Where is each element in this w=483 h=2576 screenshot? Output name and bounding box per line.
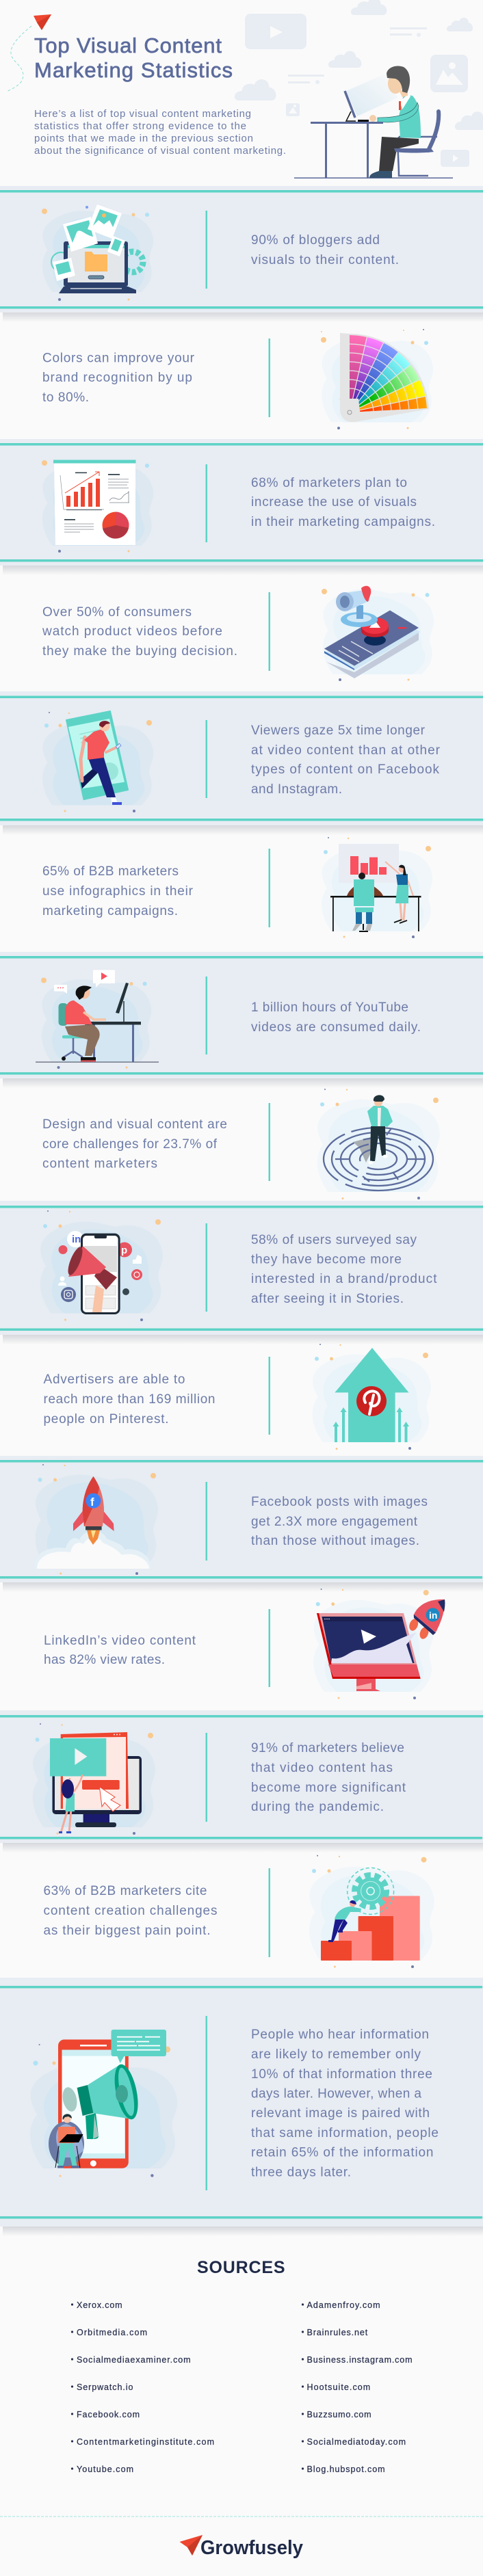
stat text: [251, 233, 399, 267]
intro text block: statistics that offer strong evidence to the: [34, 120, 246, 132]
list: sources left column: Serpwatch.io: [77, 2382, 133, 2392]
panel: stat 4: [42, 586, 434, 681]
panel: stat 8: [42, 1089, 440, 1199]
stat text: types of content on Facebook: [251, 762, 439, 777]
illustration: laptop with photos: [42, 204, 153, 301]
stat text: Over 50% of consumers: [42, 605, 192, 620]
title: Marketing Statistics: [34, 58, 233, 82]
panel: stat 10: [44, 1344, 431, 1450]
list: sources right column: Blog.hubspot.com: [306, 2465, 384, 2474]
stat text: retain 65% of the information: [251, 2146, 434, 2160]
intro text block: points that we made in the previous section: [34, 133, 253, 144]
list: sources right column: Adamenfroy.com: [306, 2300, 380, 2310]
stat text: increase the use of visuals: [251, 495, 417, 509]
illustration: Pinterest growth arrow: [313, 1344, 431, 1450]
stat text: days later. However, when a: [251, 2087, 421, 2101]
stat text: [44, 1372, 215, 1426]
list: sources right column: Hootsuite.com: [306, 2382, 370, 2392]
intro text block: Here’s a list of top visual content marketing: [34, 108, 251, 120]
stat text: reach more than 169 million: [44, 1392, 215, 1407]
list: sources right column: Brainrules.net: [306, 2328, 368, 2337]
illustration: man working at a desk: [294, 66, 453, 178]
stat text: as their biggest pain point.: [44, 1924, 211, 1938]
stat text: [251, 1233, 437, 1306]
list: sources left column: Facebook.com: [77, 2410, 140, 2419]
list: sources right column: Socialmediatoday.com: [306, 2437, 406, 2447]
intro text block: [34, 108, 286, 157]
stat text: [251, 1000, 421, 1035]
illustration: phone with megaphone and social icons: in: [72, 1234, 81, 1245]
panel: intro header: [6, 0, 483, 178]
icon: red paper plane with dashed trail: [6, 14, 51, 92]
stat text: watch product videos before: [42, 624, 222, 639]
stat text: 63% of B2B marketers cite: [44, 1884, 207, 1898]
panel: stat 5: [0, 691, 483, 835]
panel: stat 3: [0, 439, 483, 575]
stat text: than those without images.: [251, 1534, 419, 1548]
stat text: interested in a brand/product: [251, 1272, 437, 1286]
panel: stat 12: [44, 1589, 445, 1699]
stat text: [251, 1495, 428, 1548]
illustration: colour swatch fan: [321, 329, 433, 429]
stat text: [44, 1884, 218, 1938]
stat text: brand recognition by up: [42, 371, 192, 385]
illustration: phone with megaphone and social icons: p: [121, 1245, 127, 1256]
list: sources right column: Buzzsumo.com: [306, 2410, 371, 2419]
panel: stat 15: [0, 1978, 483, 2236]
illustration: report with charts: [42, 460, 153, 553]
stat text: they have become more: [251, 1253, 402, 1266]
illustration: man at computer: [36, 970, 159, 1069]
stat text: 10% of that information three: [251, 2067, 432, 2082]
stat text: [42, 1117, 227, 1171]
heading: sources: SOURCES: [197, 2258, 285, 2277]
stat text: get 2.3X more engagement: [251, 1515, 418, 1529]
stat text: has 82% view rates.: [44, 1653, 165, 1667]
illustration: man walking out of a phone: [42, 711, 153, 812]
stat text: during the pandemic.: [251, 1800, 384, 1814]
stat text: visuals to their content.: [251, 253, 399, 267]
stat text: [251, 2028, 439, 2180]
stat text: 90% of bloggers add: [251, 233, 380, 248]
panel: sources: [71, 2258, 413, 2474]
stat text: 1 billion hours of YouTube: [251, 1000, 408, 1015]
stat text: People who hear information: [251, 2028, 429, 2042]
panel: stat 13: [0, 1710, 483, 1853]
stat text: become more significant: [251, 1781, 406, 1795]
stat text: that video content has: [251, 1761, 393, 1775]
list: sources left column: Xerox.com: [77, 2300, 122, 2310]
panel: stat 6: [42, 837, 432, 938]
illustration: team reviewing a chart: [322, 837, 432, 938]
illustration: Facebook rocket launching: [34, 1464, 158, 1575]
stat text: videos are consumed daily.: [251, 1020, 421, 1035]
stat text: to 80%.: [42, 390, 89, 405]
stat text: at video content than at other: [251, 743, 441, 758]
stat text: and Instagram.: [251, 782, 342, 797]
illustration: woman selecting video on screen: [33, 1723, 155, 1835]
stat text: use infographics in their: [42, 884, 194, 899]
stat text: [44, 1634, 196, 1667]
panel: stat 14: [44, 1855, 434, 1968]
stat text: core challenges for 23.7% of: [42, 1137, 218, 1152]
stat text: 91% of marketers believe: [251, 1741, 404, 1755]
title: [34, 34, 233, 82]
stat text: 58% of users surveyed say: [251, 1233, 417, 1247]
list: sources left column: Contentmarketinginstitute.com: [77, 2437, 214, 2447]
list: sources left column: [71, 2300, 214, 2474]
stat text: are likely to remember only: [251, 2047, 421, 2062]
panel: stat 1: [0, 186, 483, 322]
stat text: content creation challenges: [44, 1904, 218, 1918]
stat text: Facebook posts with images: [251, 1495, 428, 1509]
list: sources left column: Orbitmedia.com: [77, 2328, 147, 2337]
stat text: they make the buying decision.: [42, 644, 237, 659]
title: Top Visual Content: [34, 34, 222, 57]
stat text: [42, 351, 195, 405]
stat text: [251, 1741, 406, 1814]
stat text: Viewers gaze 5x time longer: [251, 723, 426, 738]
list: sources right column: Business.instagram.com: [306, 2355, 412, 2365]
logo: Growfusely: Growfusely: [200, 2537, 303, 2559]
stat text: three days later.: [251, 2165, 351, 2180]
panel: stat 9: [0, 1201, 483, 1344]
stat text: after seeing it in Stories.: [251, 1292, 404, 1306]
stat text: relevant image is paired with: [251, 2106, 430, 2121]
illustration: video phone and megaphone: [322, 586, 434, 681]
stat text: Colors can improve your: [42, 351, 195, 366]
stat text: [42, 864, 194, 918]
illustration: man pushing gear up steps: [309, 1855, 434, 1968]
stat text: that same information, people: [251, 2126, 439, 2140]
list: sources left column: Youtube.com: [77, 2465, 133, 2474]
background decoration icons: [235, 0, 483, 167]
stat text: people on Pinterest.: [44, 1412, 168, 1426]
stat text: 65% of B2B marketers: [42, 864, 179, 879]
illustration: phone with megaphone and seated woman: [30, 2030, 177, 2177]
illustration: man standing in a maze: [317, 1089, 440, 1199]
stat text: LinkedIn’s video content: [44, 1634, 196, 1648]
panel: stat 11: [0, 1456, 483, 1592]
stat text: [42, 605, 237, 659]
illustration: monitor with LinkedIn rocket: [313, 1589, 445, 1699]
stat text: in their marketing campaigns.: [251, 515, 435, 529]
illustration: monitor with LinkedIn rocket: in: [429, 1610, 437, 1621]
list: sources left column: Socialmediaexaminer.com: [77, 2355, 191, 2365]
list: sources right column: [302, 2300, 412, 2474]
illustration: Facebook rocket launching: f: [90, 1496, 94, 1509]
stat text: Design and visual content are: [42, 1117, 227, 1132]
intro text block: about the significance of visual content marketing.: [34, 145, 286, 157]
stat text: marketing campaigns.: [42, 904, 178, 918]
stat text: 68% of marketers plan to: [251, 476, 407, 490]
panel: stat 7: [0, 952, 483, 1088]
panel: stat 2: [42, 329, 433, 429]
stat text: [251, 476, 435, 529]
illustration: phone with megaphone and social icons: [40, 1210, 163, 1321]
stat text: Advertisers are able to: [44, 1372, 185, 1387]
stat text: content marketers: [42, 1157, 157, 1171]
stat text: [251, 723, 441, 797]
